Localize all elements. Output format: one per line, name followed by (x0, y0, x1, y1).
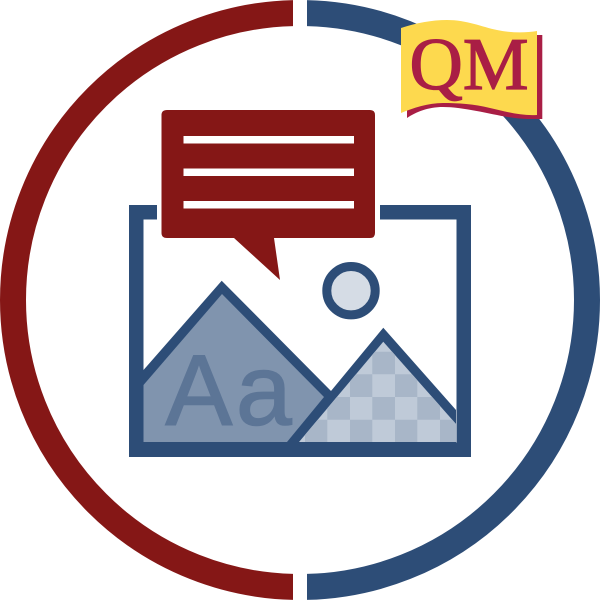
QM logo flag (401, 20, 542, 119)
mountain outline (144, 281, 456, 443)
flag shadow (407, 35, 542, 119)
large mountain with Aa (144, 294, 324, 446)
red left half of ring (0, 0, 293, 600)
QM letters: QM (410, 24, 528, 106)
small checkered mountain (299, 342, 456, 442)
picture frame (136, 212, 464, 450)
sun circle (327, 266, 375, 315)
mountains (144, 281, 460, 446)
blue right half of ring (307, 0, 600, 600)
bubble body and tail (162, 110, 375, 280)
Aa text: Aa (166, 334, 292, 446)
speech bubble (162, 110, 375, 280)
flag body (401, 20, 537, 115)
bubble text lines (184, 136, 354, 208)
